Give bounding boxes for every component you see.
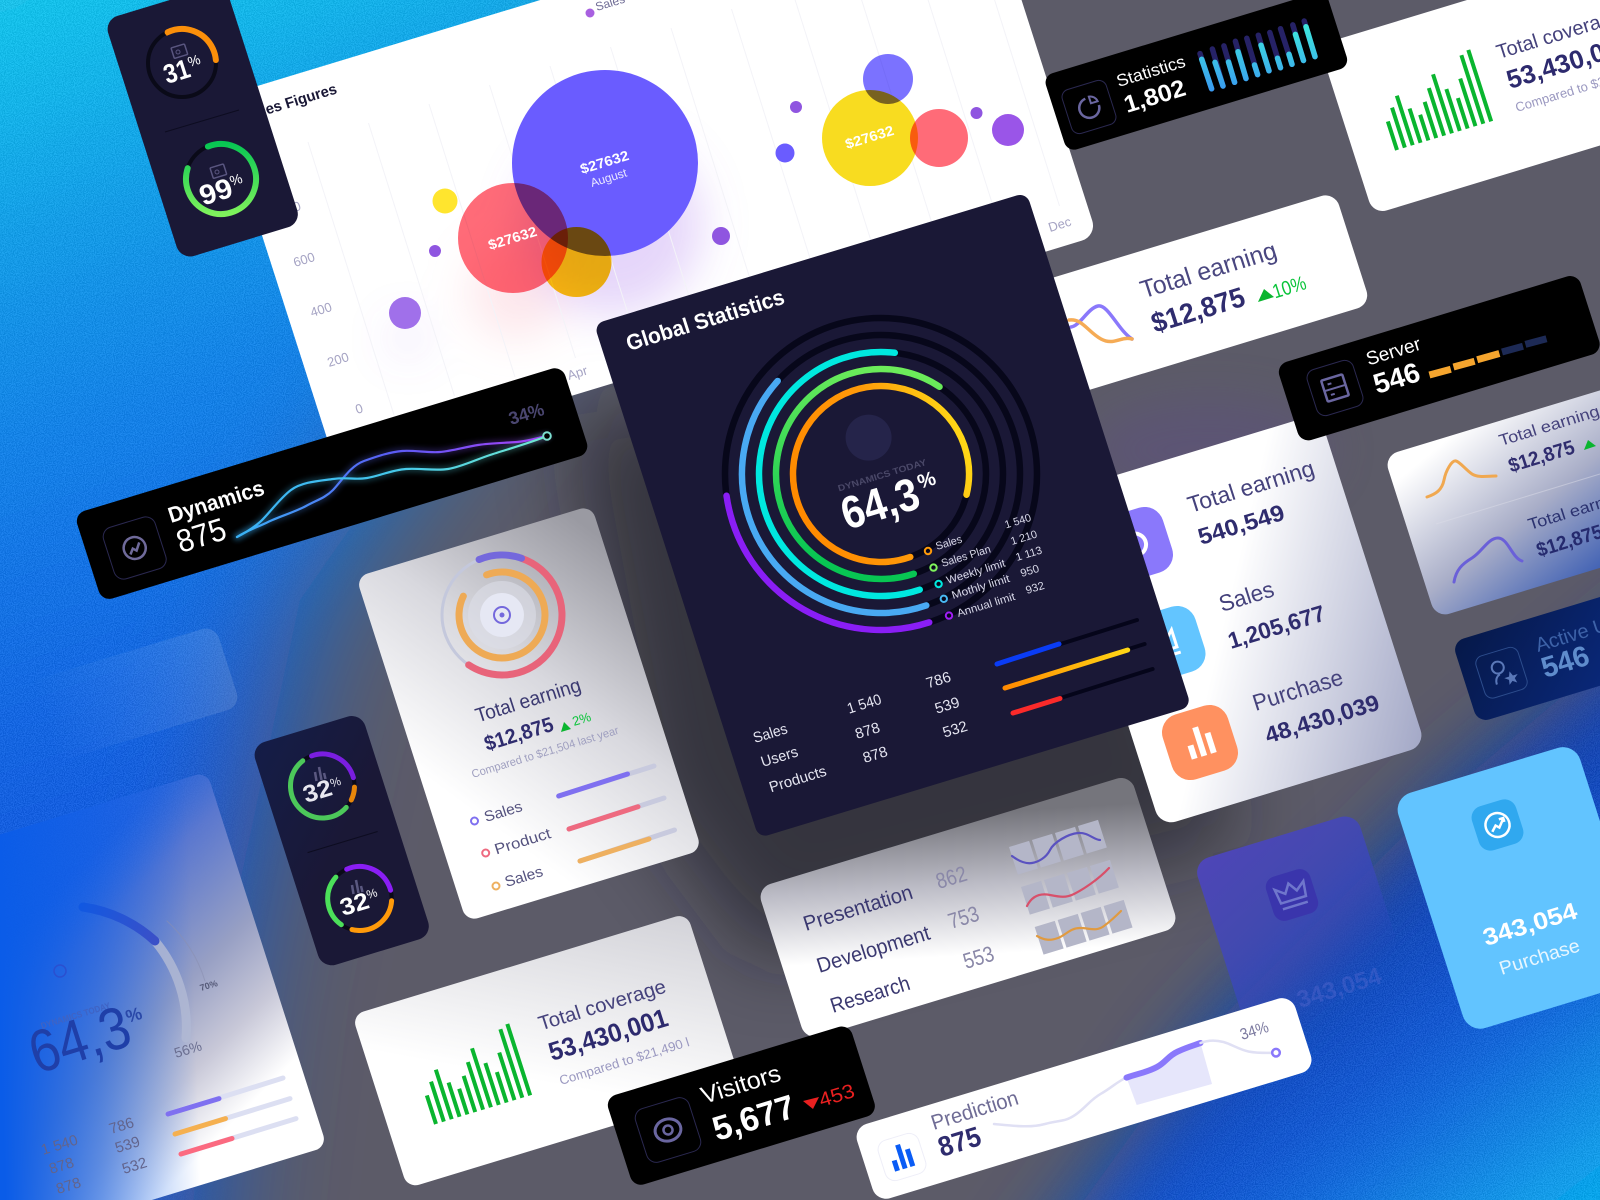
- icon: orange badge: [1157, 700, 1243, 785]
- server text: [1364, 334, 1424, 400]
- gauge labels: %: [123, 1003, 145, 1027]
- radial legend: Annual limit: [956, 591, 1017, 620]
- list text: [1184, 455, 1382, 748]
- icon: trend: [1468, 796, 1527, 854]
- coverage text: Compared to $21,490 l: [557, 1034, 691, 1088]
- table numbers: 539: [113, 1133, 142, 1157]
- visitors text: [698, 1060, 857, 1149]
- grid lines: [308, 0, 1060, 415]
- panel: faded crown card: [1193, 813, 1438, 1119]
- icon: server: [1305, 358, 1365, 418]
- radial legend: Sales: [934, 533, 964, 553]
- gauge bottom value: [337, 880, 379, 922]
- progress bars: [168, 1078, 296, 1154]
- panel: visitors bar: [605, 1024, 878, 1187]
- gauge 31: 31: [160, 54, 194, 90]
- panel: total earning ring card: [356, 505, 702, 922]
- row text: $12,875: [1506, 437, 1578, 477]
- bubble labels: August: [589, 165, 629, 190]
- row values: 753: [945, 901, 982, 934]
- mini sparklines: [1012, 833, 1121, 940]
- dynamics text: [165, 475, 267, 560]
- list text: Sales: [1216, 576, 1277, 617]
- axis labels: 600: [291, 249, 317, 270]
- gauge arc: [54, 907, 205, 1038]
- purchase text: Purchase: [1497, 936, 1583, 980]
- gauge 31: [137, 18, 227, 108]
- dynamics text: 875: [172, 511, 231, 560]
- radial chart: [684, 277, 1078, 671]
- active text: [1533, 603, 1600, 685]
- icon: eye: [633, 1095, 703, 1165]
- coverage text: Total coverage: [536, 976, 669, 1035]
- earning text: [1137, 237, 1309, 339]
- divider: [165, 110, 239, 132]
- panel: total coverage top right: [1319, 0, 1600, 214]
- gauge 31: %: [186, 51, 202, 70]
- table: Sales: [751, 720, 790, 747]
- gauge labels: 64,3: [21, 993, 139, 1086]
- gauge bottom value: 32: [337, 888, 373, 922]
- axis labels: 400: [308, 299, 334, 320]
- radial legend: 1 540: [1003, 512, 1033, 531]
- table: 539: [933, 694, 962, 718]
- table: [751, 669, 970, 796]
- legend: Sales: [482, 798, 525, 826]
- row values: [933, 861, 997, 974]
- panel: presentation development research: [757, 775, 1179, 1040]
- row text: [1497, 403, 1600, 562]
- faint card top-left: [0, 625, 241, 808]
- panel: two-row earning card right: [1384, 369, 1600, 618]
- table: 532: [941, 718, 970, 741]
- gauge 99: [175, 133, 267, 225]
- faded value: 343,054: [1294, 963, 1385, 1014]
- row labels: [801, 881, 933, 1018]
- prediction text: Prediction: [928, 1087, 1021, 1135]
- icon: purple badge: [1092, 502, 1178, 587]
- prediction text: 875: [934, 1121, 985, 1163]
- table: Products: [767, 763, 829, 796]
- bar chart: [413, 1024, 530, 1124]
- prediction percent: 34%: [1238, 1019, 1271, 1044]
- table: 1 540: [845, 691, 884, 718]
- visitors text: 453: [816, 1080, 857, 1112]
- radial legend: 932: [1024, 580, 1046, 597]
- list text: Total earning: [1184, 455, 1317, 518]
- earning text: Compared to $21,504 last year: [470, 725, 620, 781]
- divider: [308, 832, 378, 853]
- earning text: $12,875: [1147, 281, 1249, 339]
- table: 786: [924, 669, 953, 692]
- icon: blue badge: [1125, 601, 1210, 686]
- bubbles: [389, 54, 1024, 329]
- gauge top value: 32: [300, 775, 336, 809]
- visitors text: 5,677: [708, 1088, 800, 1149]
- panel: dark 32 percent gauges: [251, 713, 432, 969]
- coverage text: [536, 976, 691, 1088]
- bubble labels: $27632: [578, 147, 631, 177]
- axis labels: Dec: [1046, 214, 1073, 235]
- purchase text: [1480, 898, 1583, 980]
- panel: dynamics bar: [74, 366, 590, 602]
- icon: pie: [1060, 78, 1118, 136]
- center readout: DYNAMICS TODAY: [837, 457, 928, 493]
- row labels: Development: [814, 922, 933, 978]
- list text: Purchase: [1249, 664, 1346, 716]
- sparkline: [1069, 306, 1132, 342]
- progress bars: [559, 766, 674, 861]
- statistics text: Statistics: [1114, 52, 1188, 91]
- server text: 546: [1369, 357, 1424, 400]
- row labels: Research: [828, 972, 913, 1018]
- gauge top value: [300, 767, 343, 809]
- chart title: Sales Figures: [242, 81, 339, 125]
- row text: Total earning: [1497, 403, 1600, 450]
- list text: 540,549: [1195, 499, 1288, 550]
- table: 878: [861, 743, 890, 767]
- panel: active users faded: [1452, 578, 1600, 723]
- gauge labels: [21, 978, 219, 1086]
- radial legend: [925, 512, 1046, 620]
- radial legend: 1 113: [1014, 545, 1044, 564]
- icon: bars: [875, 1131, 929, 1183]
- prediction text: [928, 1087, 1021, 1163]
- radial legend: 950: [1019, 563, 1041, 580]
- gauge top: [277, 741, 368, 831]
- bubble labels: $27632: [843, 122, 896, 152]
- gauge labels: 70%: [199, 978, 219, 993]
- legend: Product: [492, 825, 554, 858]
- purchase text: 343,054: [1480, 898, 1581, 952]
- icon: user star: [1474, 645, 1529, 700]
- panel: dark 31 and 99 percent gauges: [104, 0, 301, 260]
- bubble labels: $27632: [486, 223, 539, 253]
- level dashes: [1429, 339, 1546, 375]
- table numbers: 532: [120, 1154, 149, 1178]
- radial legend: Mothly limit: [950, 573, 1011, 602]
- dynamics percent: 34%: [506, 399, 547, 429]
- active text: 546: [1537, 640, 1593, 685]
- ring chart: [424, 537, 580, 693]
- gauge labels: 56%: [172, 1037, 204, 1061]
- earning text: 2%: [570, 709, 593, 729]
- center readout: 64,3: [834, 467, 926, 540]
- table numbers: 1 540: [39, 1132, 80, 1159]
- table: Users: [759, 744, 800, 771]
- gauge labels: DYNAMICS TODAY: [40, 1000, 112, 1031]
- axis labels: 200: [325, 349, 351, 370]
- legend: Sales: [503, 863, 545, 891]
- list text: 48,430,039: [1262, 689, 1382, 748]
- divider: [1436, 474, 1600, 524]
- legend: [471, 798, 554, 891]
- coverage text: [1494, 5, 1600, 115]
- earning text: $12,875: [482, 713, 557, 756]
- row values: 862: [933, 861, 970, 894]
- dynamics text: Dynamics: [165, 475, 267, 528]
- panel: total earning, sales, purchase list: [1054, 413, 1426, 826]
- axis labels: 0: [353, 400, 365, 417]
- center readout: [834, 415, 939, 540]
- gauge top value: %: [328, 774, 343, 790]
- coverage text: 53,430,001: [545, 1002, 672, 1067]
- radial legend: Weekly limit: [945, 558, 1007, 587]
- bubble glows: [392, 135, 702, 354]
- axis labels: 800: [277, 198, 303, 219]
- visitors text: Visitors: [698, 1060, 784, 1110]
- row labels: Presentation: [801, 881, 916, 936]
- panel: sales figures bubble chart: [218, 0, 1097, 467]
- table numbers: 786: [107, 1114, 136, 1138]
- panel: light blue purchase card: [1393, 743, 1600, 1033]
- progress bars: [997, 620, 1153, 713]
- icon: trend: [101, 514, 169, 582]
- earning text: Total earning: [1137, 237, 1280, 304]
- panel: statistics bar: [1043, 0, 1350, 152]
- row values: 553: [960, 941, 997, 974]
- axis labels: Apr: [565, 362, 590, 383]
- bar chart: [1200, 21, 1315, 89]
- gauge 99: %: [228, 170, 244, 189]
- mini heat blocks: [1009, 820, 1133, 955]
- earning text: 10%: [1270, 272, 1309, 303]
- gauge 99: 99: [195, 172, 236, 211]
- radial legend: Sales Plan: [940, 544, 992, 570]
- gauge bottom: [315, 854, 404, 943]
- earning text: [470, 675, 620, 781]
- line chart: [237, 432, 551, 537]
- panel: total coverage bottom: [352, 913, 742, 1188]
- statistics text: [1114, 52, 1189, 119]
- sparklines: [1427, 461, 1522, 582]
- bubble labels: [486, 122, 896, 253]
- list text: 1,205,677: [1225, 600, 1328, 654]
- panel: faded dynamics gauge card: [0, 772, 327, 1200]
- panel: global statistics: [594, 192, 1191, 838]
- server text: Server: [1364, 334, 1424, 370]
- panel: prediction card: [853, 995, 1315, 1200]
- prediction line chart: [994, 1041, 1280, 1126]
- bar chart: [1374, 50, 1491, 150]
- table numbers: [39, 1114, 149, 1198]
- title: Global Statistics: [623, 284, 787, 356]
- statistics text: 1,802: [1121, 75, 1189, 119]
- center readout: %: [915, 468, 939, 494]
- table numbers: 878: [47, 1154, 76, 1178]
- axis labels: [277, 198, 1073, 417]
- panel: server bar: [1276, 273, 1600, 443]
- gauge bottom value: %: [365, 885, 379, 902]
- legend: [586, 0, 627, 18]
- table numbers: 878: [54, 1174, 83, 1198]
- radial legend: 1 210: [1009, 529, 1039, 548]
- panel: total earning mid right: [1019, 192, 1371, 400]
- earning text: Total earning: [473, 675, 584, 727]
- icon: crown: [1263, 866, 1321, 924]
- table: 878: [853, 719, 882, 743]
